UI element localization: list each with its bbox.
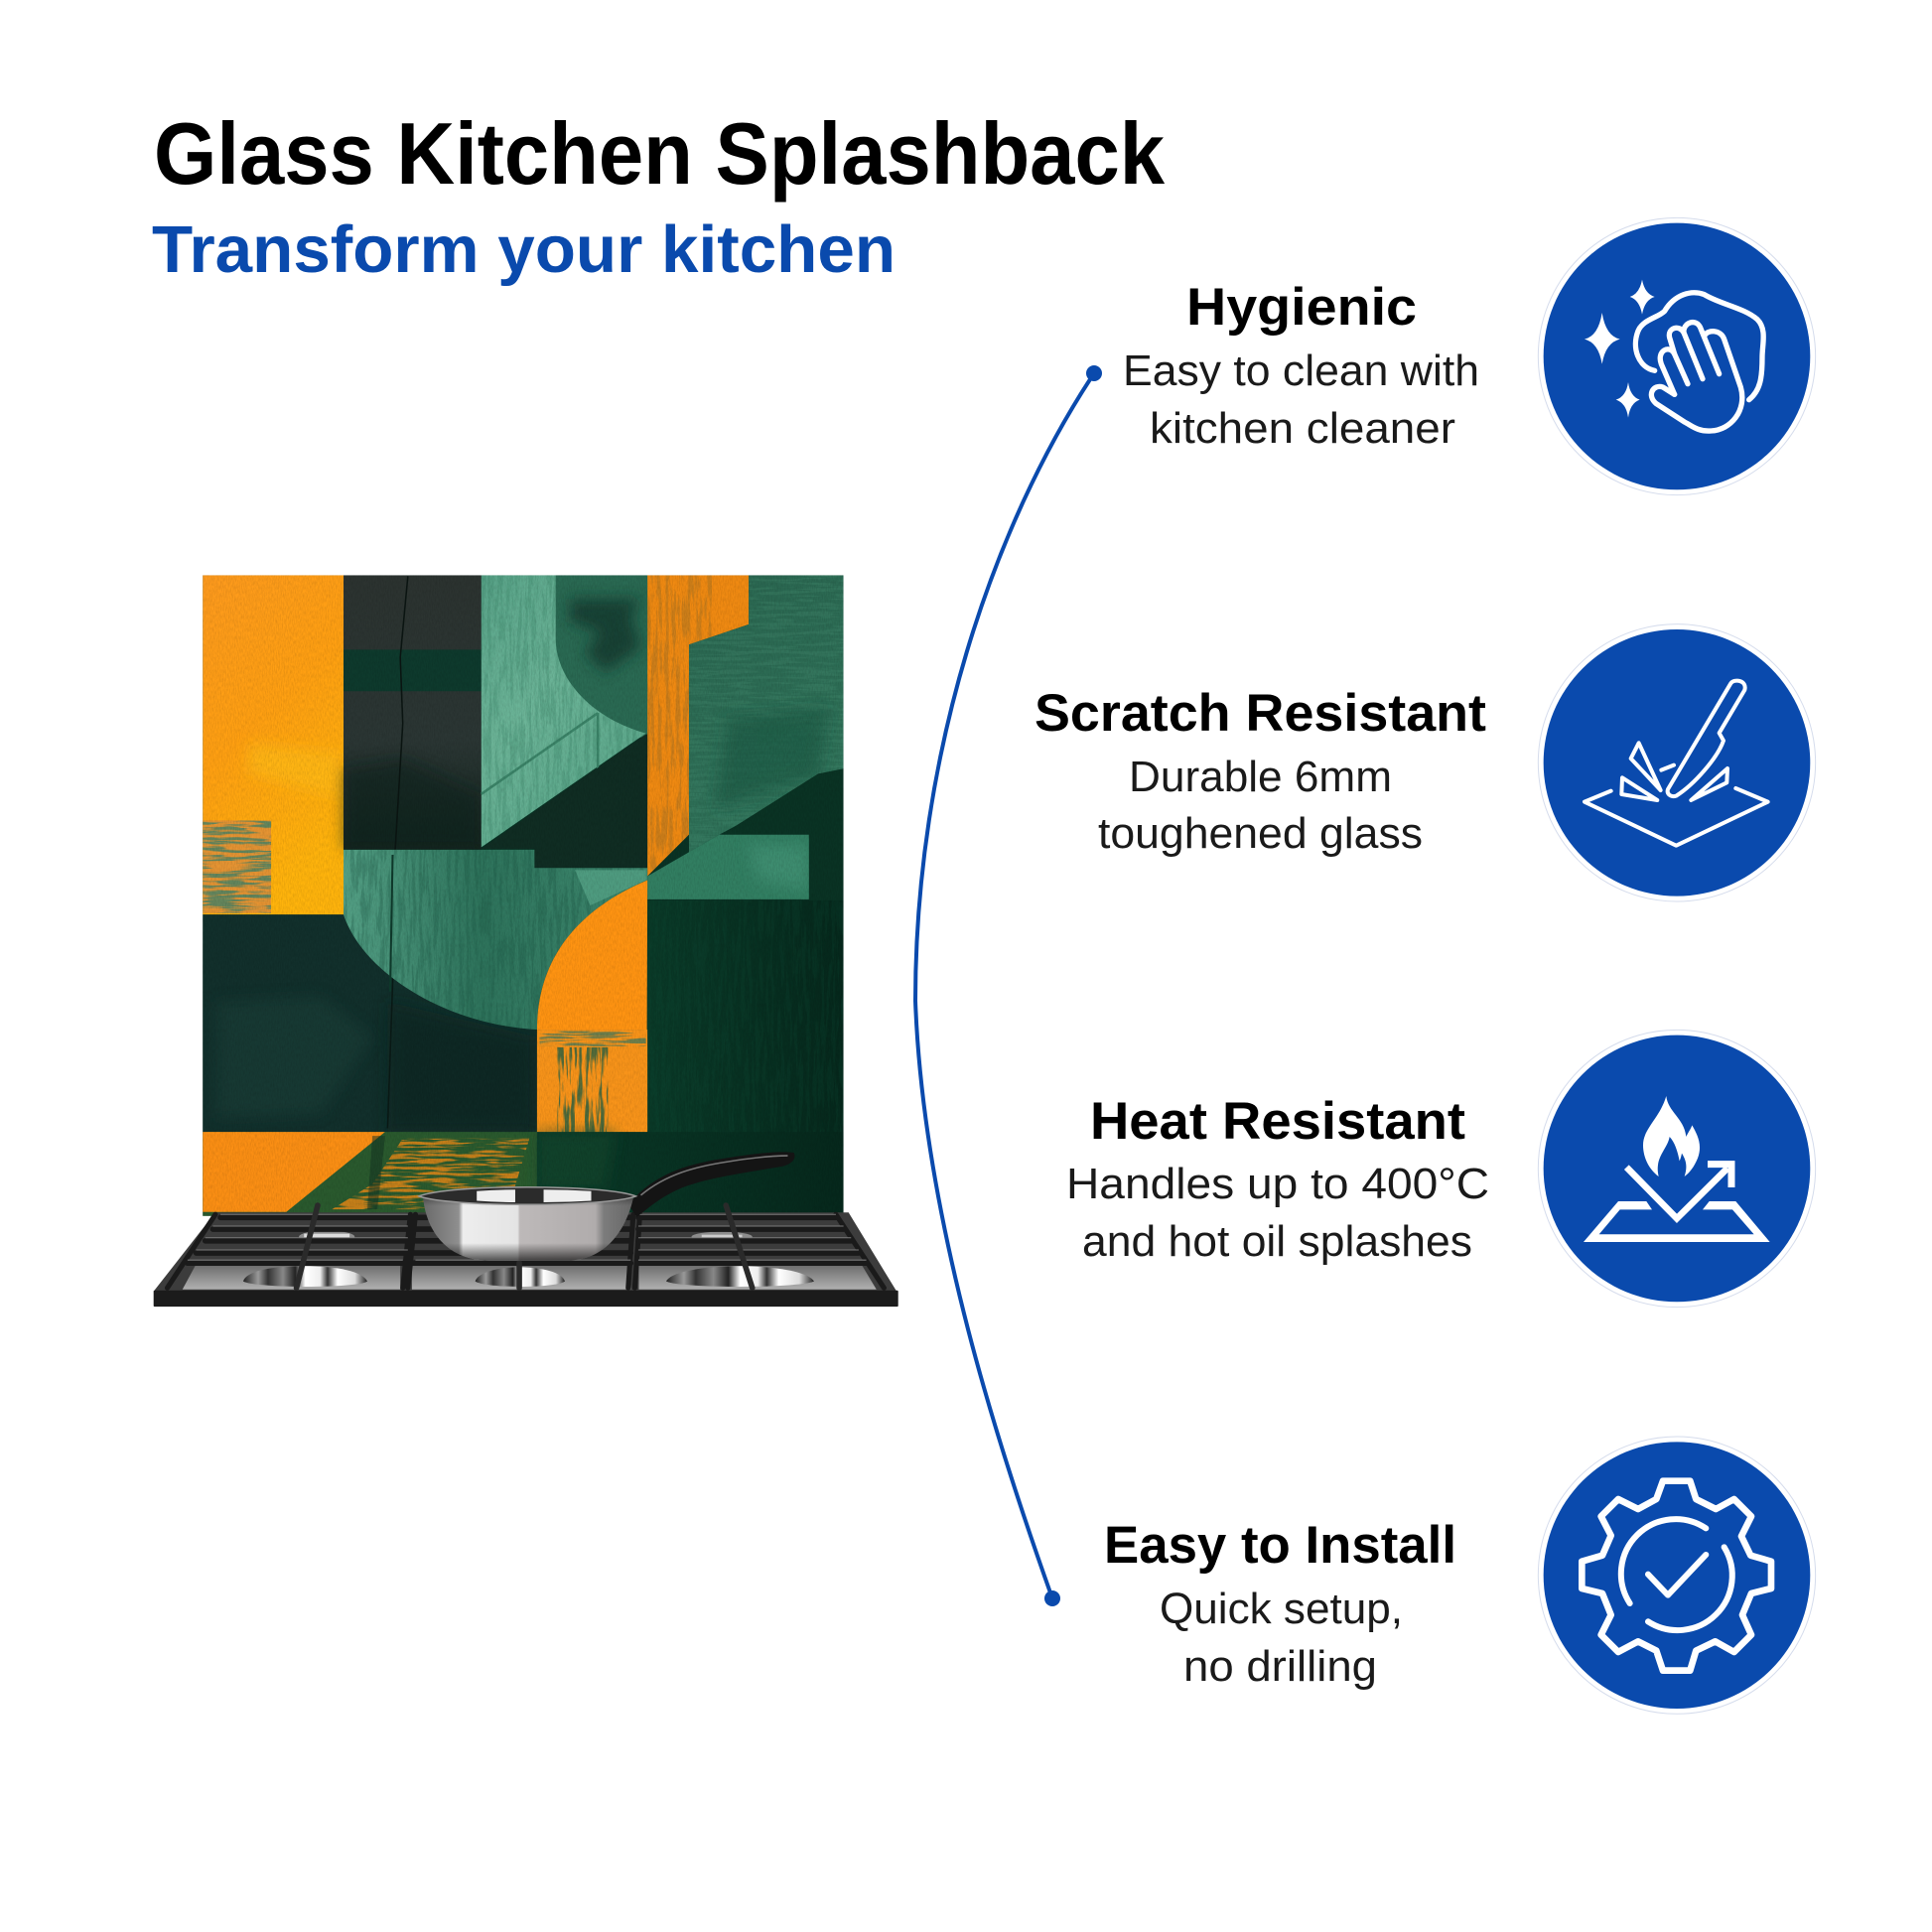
grate bars [167, 1214, 884, 1288]
feature: Scratch Resistant [1035, 684, 1486, 858]
description: Easy to Install [1160, 1585, 1403, 1691]
icon: gear with check mark [1538, 1437, 1816, 1714]
description: Easy to Install: no drilling [1183, 1642, 1377, 1691]
description: Heat Resistant: and hot oil splashes [1082, 1217, 1472, 1266]
knife and shards [1585, 681, 1768, 846]
product image: splashback with hob and pan [154, 575, 898, 1307]
description: Scratch Resistant: Durable 6mm [1129, 753, 1392, 801]
description: Hygienic: Easy to clean with [1123, 346, 1479, 395]
heading: Easy to Install: Easy to Install [1104, 1516, 1456, 1575]
plate [1584, 1201, 1770, 1242]
arrow [1626, 1168, 1727, 1218]
splashback painting [203, 575, 844, 1217]
cloth and hand [1635, 293, 1763, 431]
description: Scratch Resistant: toughened glass [1098, 809, 1423, 858]
title: Glass Kitchen Splashback [154, 104, 1166, 203]
gear [1582, 1481, 1771, 1671]
feature: Easy to Install [1104, 1516, 1456, 1691]
icon: knife scratching glass [1538, 624, 1816, 901]
frying pan [419, 1152, 794, 1261]
description: Heat Resistant: Handles up to 400°C [1066, 1160, 1489, 1208]
pan handle [628, 1152, 794, 1217]
pan body [423, 1198, 633, 1261]
description: Scratch Resistant [1098, 753, 1423, 858]
heading: Heat Resistant: Heat Resistant [1090, 1092, 1465, 1151]
description: Easy to Install: Quick setup, [1160, 1585, 1403, 1633]
heading: Hygienic: Hygienic [1186, 278, 1417, 337]
feature: Heat Resistant [1066, 1092, 1489, 1266]
check in ring [1621, 1519, 1732, 1630]
rear burners [299, 1231, 753, 1243]
description: Hygienic [1123, 346, 1479, 453]
grate highlights [188, 1214, 867, 1260]
hob surface [154, 1212, 897, 1292]
connector curve with end dots [915, 365, 1102, 1606]
grate cross bars [297, 1205, 753, 1288]
description: Hygienic: kitchen cleaner [1150, 404, 1455, 453]
hob front edge [154, 1291, 898, 1307]
description: Heat Resistant [1066, 1160, 1489, 1266]
heading: Scratch Resistant: Scratch Resistant [1035, 684, 1486, 743]
icon: hand wiping with sparkles [1538, 217, 1816, 495]
feature: Hygienic [1123, 278, 1479, 453]
flame [1643, 1096, 1700, 1176]
hob [154, 1205, 898, 1307]
front burners [243, 1266, 814, 1287]
icon: flame and reflected heat [1538, 1030, 1816, 1308]
sparkles [1585, 280, 1655, 418]
burner plates [183, 1264, 877, 1290]
subtitle: Transform your kitchen [152, 212, 896, 287]
pan rim [419, 1187, 635, 1204]
